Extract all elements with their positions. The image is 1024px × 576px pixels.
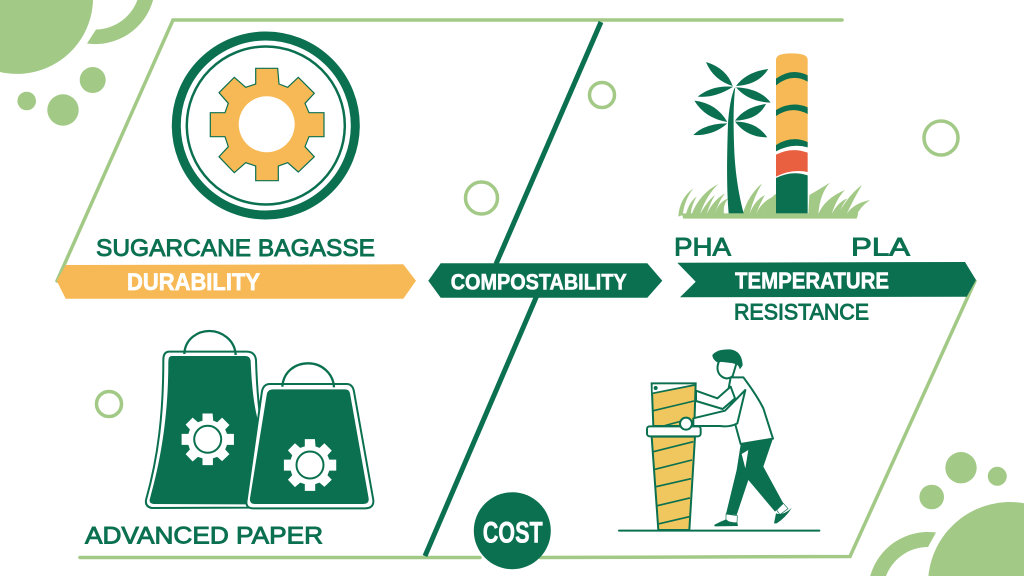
head bbox=[717, 361, 737, 378]
ribbon: durability bbox=[57, 264, 416, 299]
ribbon: compostability bbox=[428, 263, 662, 298]
shoes bbox=[777, 503, 788, 515]
icon: bag gear right bbox=[284, 439, 336, 491]
label: resistance: RESISTANCE bbox=[734, 299, 869, 324]
palm leaves bbox=[693, 62, 771, 137]
pants bbox=[726, 439, 783, 515]
ground line bbox=[619, 528, 819, 534]
label: PHA: PHA bbox=[674, 234, 731, 262]
collar bbox=[647, 426, 701, 436]
upper cone bbox=[652, 383, 696, 426]
palm trunk bbox=[727, 87, 744, 213]
decorative circles: bottom right bbox=[870, 452, 1024, 576]
label: PLA: PLA bbox=[851, 234, 910, 262]
label: sugarcane bagasse: SUGARCANE BAGASSE bbox=[96, 235, 375, 262]
ribbon: temperature: TEMPERATURE bbox=[735, 267, 889, 293]
badge: cost: COST bbox=[483, 517, 543, 550]
ribbon: temperature bbox=[677, 262, 976, 297]
small bag bbox=[246, 384, 373, 508]
ribbon: compostability: COMPOSTABILITY bbox=[451, 269, 627, 294]
ribbon: durability: DURABILITY bbox=[127, 269, 260, 296]
bamboo stalk bbox=[776, 53, 808, 145]
icon: bag gear left bbox=[182, 413, 234, 465]
icon: palm tree and bamboo over grass bbox=[678, 53, 870, 219]
illustration: person at paper cup stack bbox=[619, 349, 819, 531]
icon: two shopping bags with gears bbox=[146, 331, 373, 508]
label: advanced paper: ADVANCED PAPER bbox=[85, 522, 323, 549]
torso bbox=[728, 377, 773, 444]
lower cone bbox=[652, 437, 695, 530]
large bag bbox=[146, 352, 261, 508]
grass bbox=[678, 183, 870, 219]
centre diagonal divider bbox=[425, 22, 601, 556]
icon: gear in concentric rings bbox=[176, 36, 355, 215]
arms bbox=[696, 387, 735, 409]
decorative circles: top left bbox=[0, 0, 153, 126]
knob bbox=[680, 418, 692, 430]
hollow accent circles bbox=[96, 82, 958, 416]
badge: cost bbox=[474, 492, 551, 569]
